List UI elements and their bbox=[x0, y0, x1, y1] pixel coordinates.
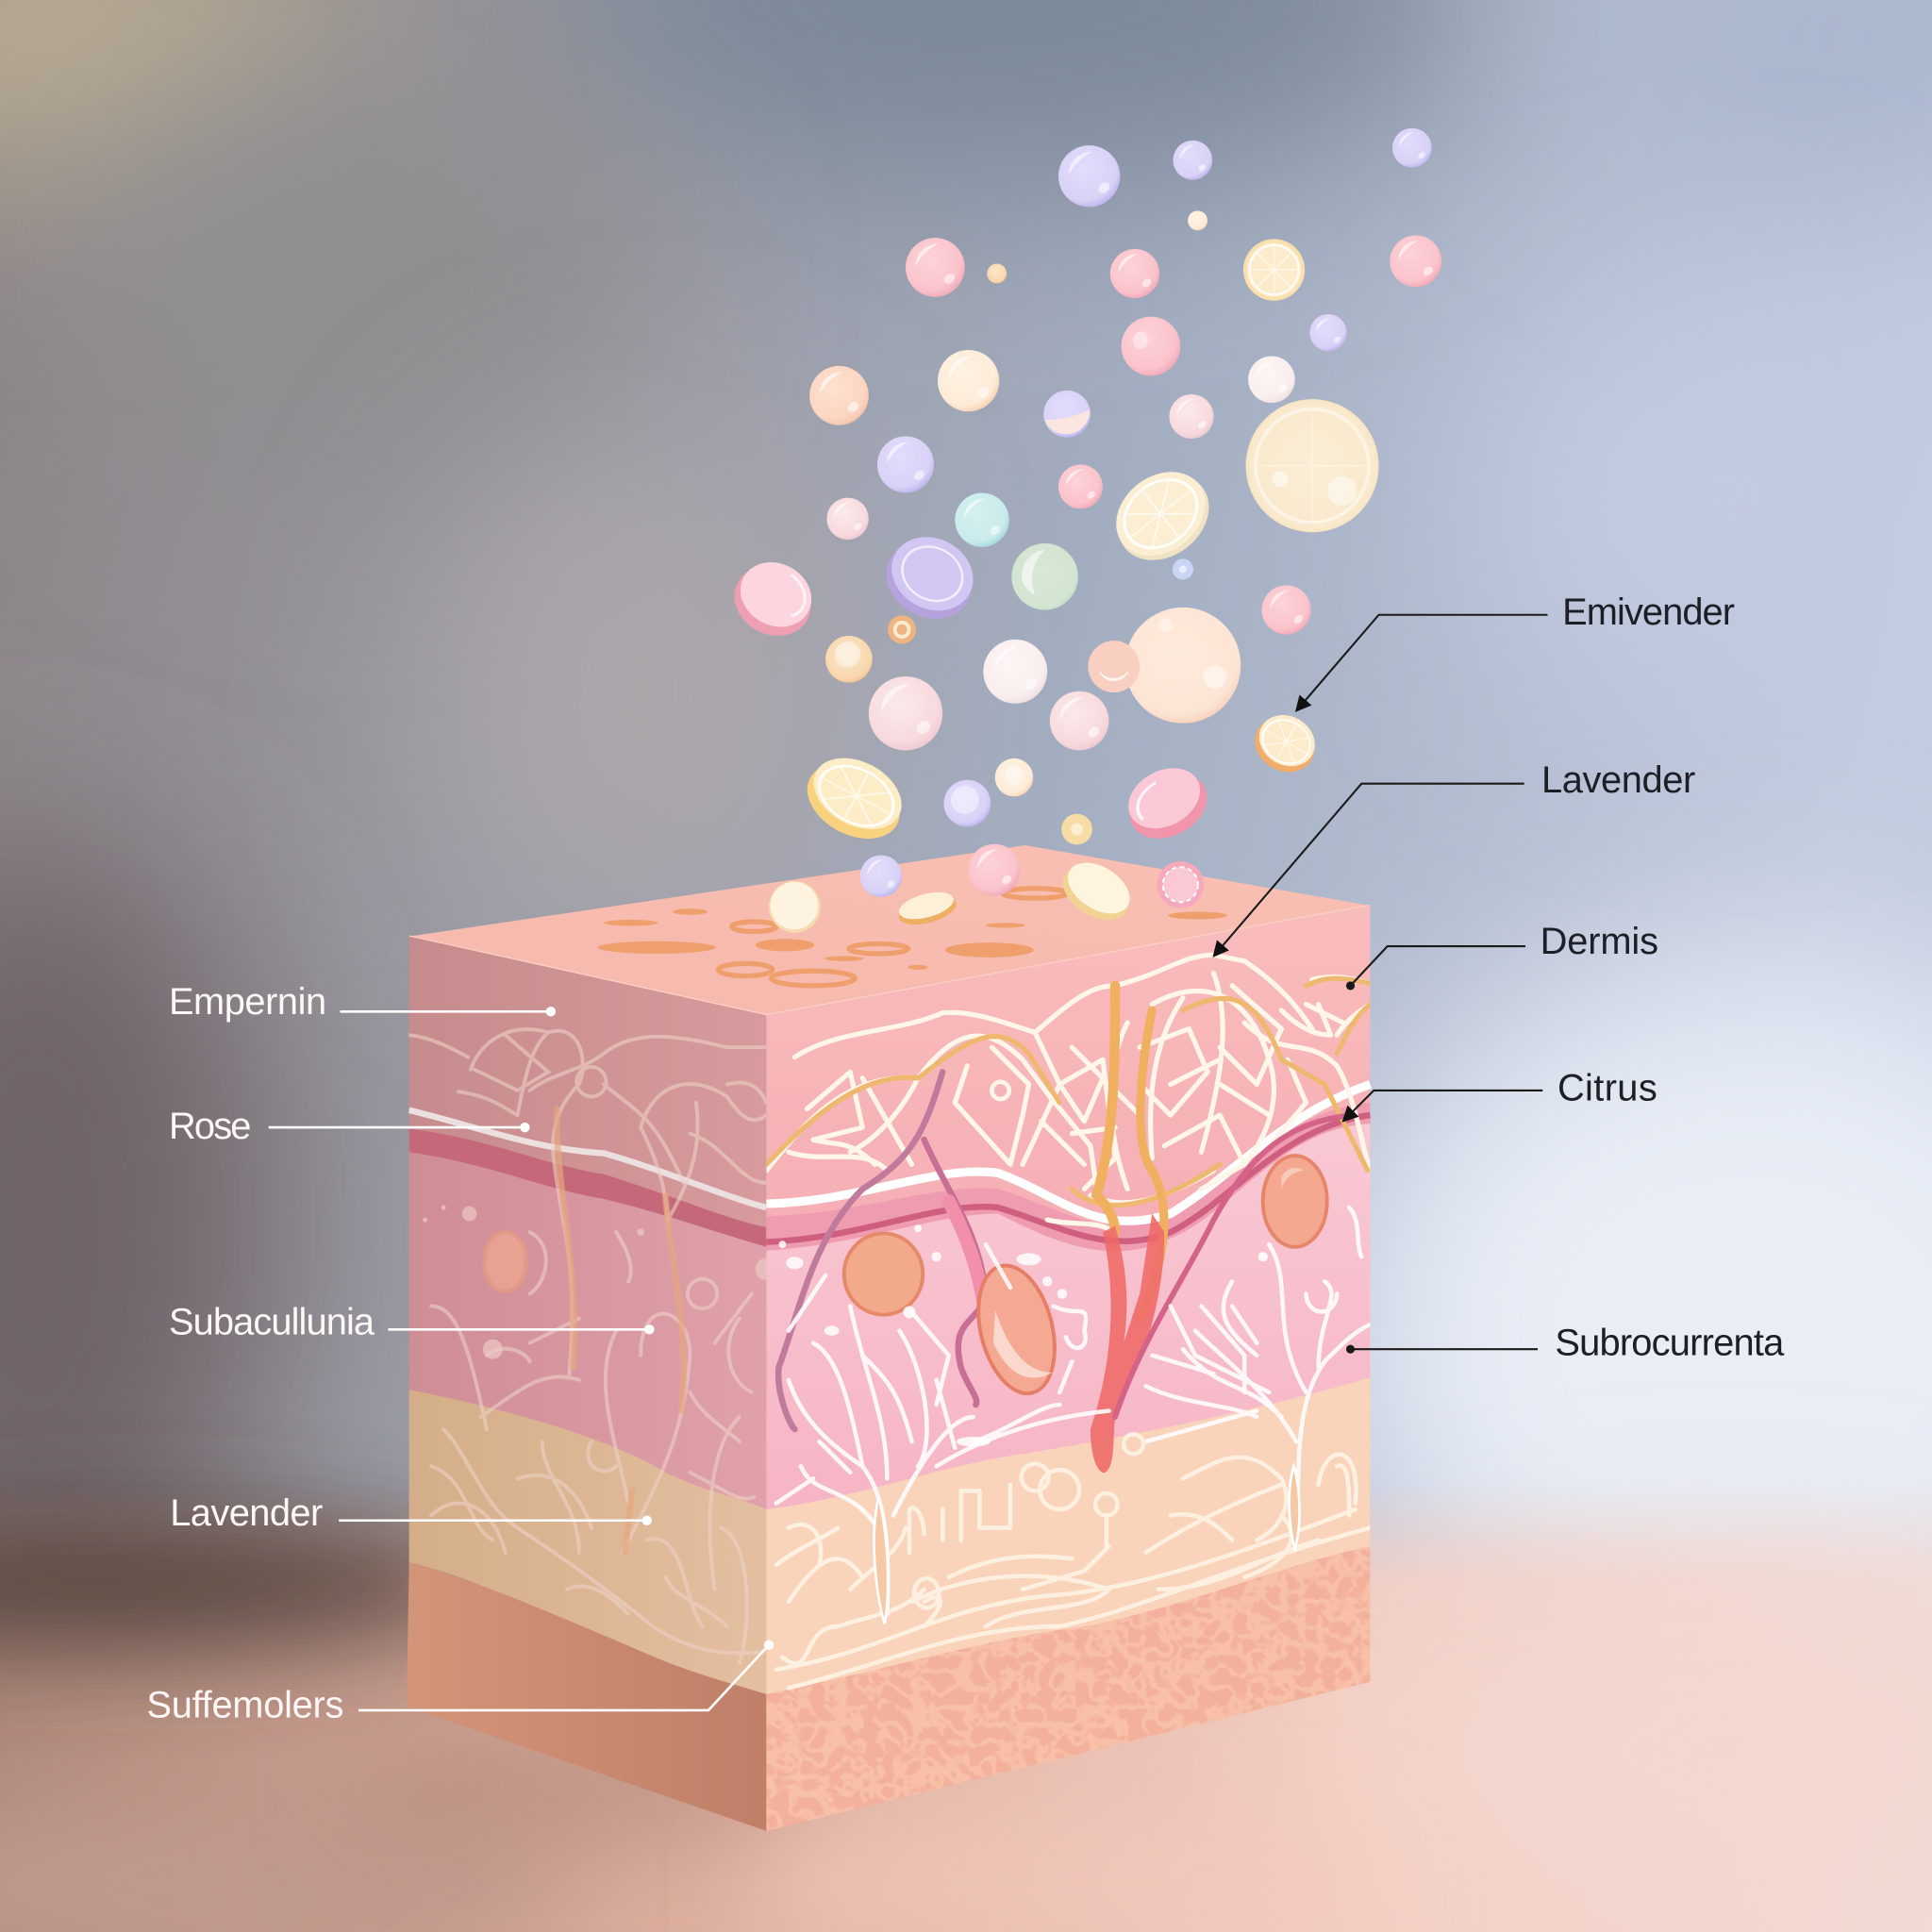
citrus bbox=[1243, 239, 1305, 301]
left face layers bbox=[407, 937, 777, 1831]
cream-layer fibres bbox=[776, 1434, 1370, 1688]
ring: orange bbox=[888, 615, 916, 643]
bubble: pink bbox=[1261, 585, 1311, 635]
label: Emivender: Emivender bbox=[1562, 591, 1735, 633]
bubble: peach bbox=[809, 366, 869, 425]
label: Lavender (left) bbox=[170, 1492, 652, 1534]
label: Dermis bbox=[1346, 921, 1658, 990]
label: Empernin bbox=[169, 981, 556, 1023]
bubble: pink pale bbox=[869, 676, 942, 750]
label: Lavender (left): Lavender bbox=[170, 1492, 323, 1534]
top face of cube bbox=[409, 845, 1370, 1015]
bubble: pink bbox=[1122, 317, 1180, 375]
bubbles and citrus actives bbox=[722, 128, 1441, 941]
label: Suffemolers: Suffemolers bbox=[146, 1685, 343, 1726]
bubble: pale pink bbox=[1170, 394, 1214, 439]
vessel: red bbox=[1091, 1214, 1164, 1473]
right face layers bbox=[766, 906, 1370, 1836]
white line, left bbox=[409, 1110, 766, 1208]
cells, right bbox=[844, 1156, 1327, 1402]
label: Subrocurrenta bbox=[1346, 1323, 1785, 1364]
candy: pink lozenge bbox=[1115, 755, 1218, 851]
citrus: disc on top bbox=[1054, 851, 1141, 931]
vessel: magenta bbox=[778, 1072, 1353, 1429]
candy: pink bbox=[722, 549, 825, 649]
citrus: cream slice bbox=[1099, 454, 1225, 578]
label: Subacullunia: Subacullunia bbox=[169, 1302, 375, 1343]
bubble: cream bbox=[938, 350, 999, 411]
bubble: white bbox=[1248, 356, 1295, 403]
bubble: pink bbox=[1110, 249, 1159, 298]
label: Suffemolers bbox=[146, 1640, 774, 1726]
label: Subacullunia bbox=[169, 1302, 655, 1343]
label: Emivender bbox=[1296, 591, 1735, 711]
bubble: small peach bbox=[1088, 641, 1140, 692]
skin cube cross-section bbox=[407, 845, 1370, 1836]
citrus: slice on top bbox=[894, 887, 959, 930]
left-face fibre network bbox=[409, 1029, 766, 1663]
bubble: pink on top bbox=[969, 844, 1020, 896]
citrus: yellow slice bbox=[794, 742, 916, 854]
bubble: lavender bbox=[1173, 141, 1212, 180]
left labels bbox=[146, 981, 774, 1726]
bubble: yellow bbox=[1061, 814, 1092, 844]
dermal fibre network bbox=[766, 955, 1370, 1232]
label: Rose: Rose bbox=[169, 1106, 251, 1147]
label: Rose bbox=[169, 1106, 530, 1147]
bubble: white pink bbox=[983, 640, 1047, 704]
bubble: lavender bbox=[1058, 145, 1120, 207]
citrus: orange slice bbox=[1245, 704, 1325, 783]
cellular texture base layer bbox=[766, 1541, 1370, 1836]
rose band, right bbox=[766, 1103, 1370, 1251]
bubble: green bbox=[1011, 543, 1078, 610]
label: Subrocurrenta: Subrocurrenta bbox=[1555, 1323, 1785, 1364]
rose band, left bbox=[409, 1128, 766, 1247]
bubble: large peach bbox=[1124, 608, 1241, 724]
bubble: orange bbox=[987, 264, 1007, 283]
label: Lavender (right) bbox=[1214, 759, 1695, 957]
candy: lavender bbox=[873, 522, 988, 633]
bubble: peach bbox=[825, 636, 873, 683]
white line, right bbox=[766, 1084, 1370, 1221]
bubble: lavender bbox=[1309, 314, 1347, 351]
bubble: lavender on top bbox=[860, 855, 902, 897]
citrus: large pale bbox=[1245, 399, 1379, 532]
bubble: pink pale bbox=[1050, 691, 1109, 750]
bubble: pink bbox=[906, 238, 965, 297]
label: Citrus: Citrus bbox=[1557, 1067, 1657, 1108]
bubble: tiny blue bbox=[1173, 558, 1193, 580]
right labels bbox=[1214, 591, 1785, 1364]
label: Citrus bbox=[1343, 1067, 1657, 1122]
bubble: pink bbox=[1390, 235, 1441, 287]
ghost cell, left bbox=[484, 1232, 526, 1291]
bubble: cream bbox=[995, 758, 1033, 796]
bubble: pink bbox=[1058, 464, 1103, 508]
bubble: pale bbox=[826, 498, 869, 540]
label: Dermis: Dermis bbox=[1541, 921, 1658, 962]
bubble: lavender bbox=[877, 436, 934, 492]
bubble: lavender mix bbox=[1043, 391, 1091, 438]
bubble: lavender bbox=[943, 780, 991, 826]
bubble: cream bbox=[1188, 210, 1208, 230]
bubble: speckled pink bbox=[1157, 861, 1204, 908]
pink-layer branching fibres bbox=[776, 1208, 1370, 1614]
citrus: cream on top bbox=[760, 873, 829, 941]
bubble: lavender bbox=[1392, 128, 1432, 168]
bubble: teal bbox=[955, 492, 1009, 547]
label: Lavender (right): Lavender bbox=[1541, 759, 1695, 801]
label: Empernin: Empernin bbox=[169, 981, 326, 1023]
